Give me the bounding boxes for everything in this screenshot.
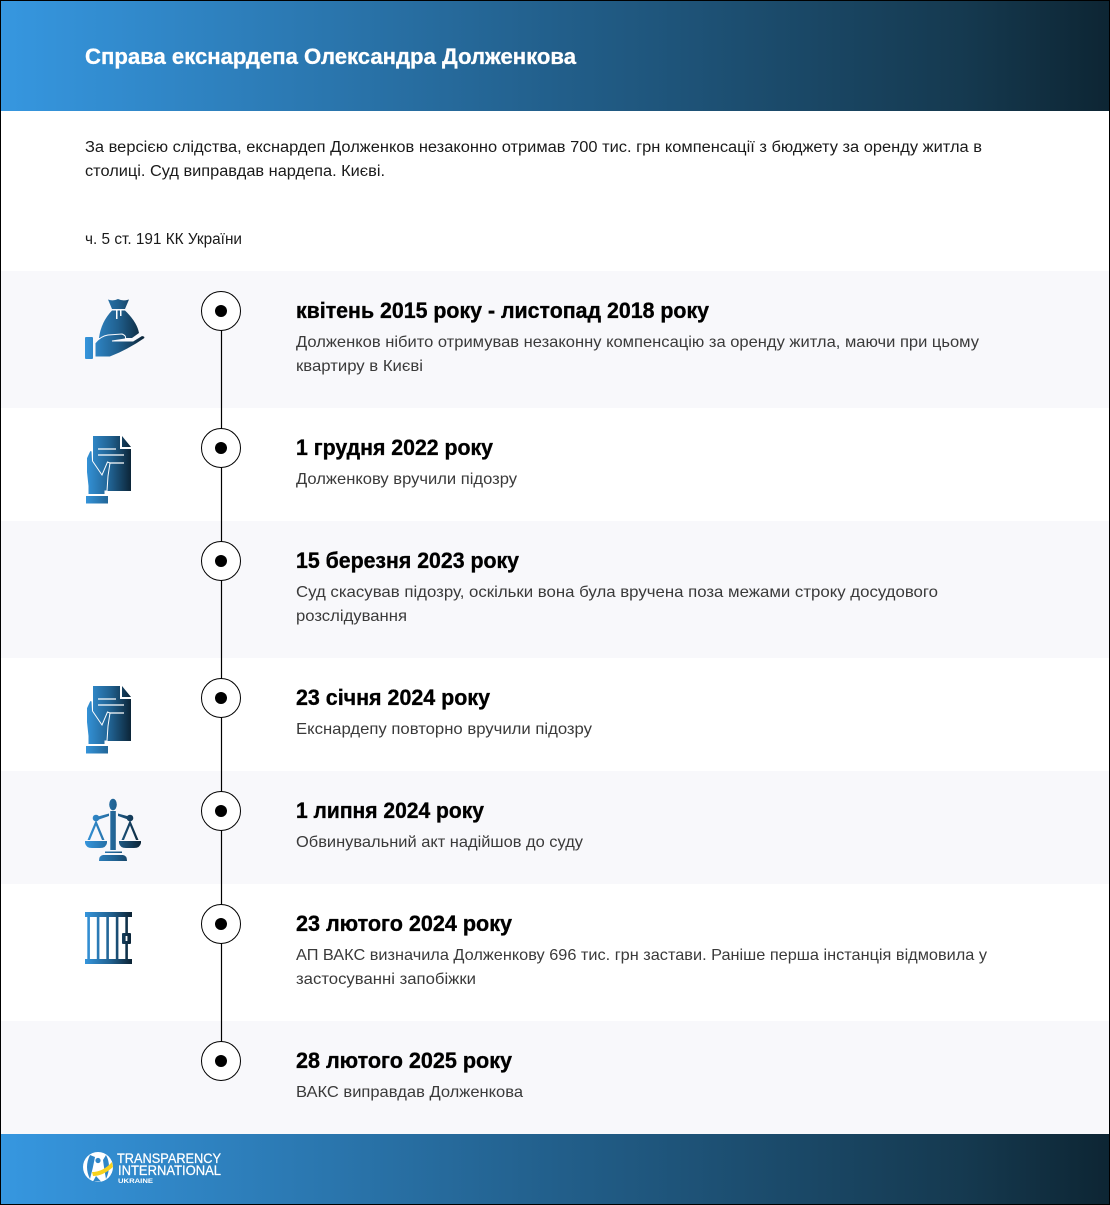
event: 23 січня 2024 [202,678,592,738]
event: 15 березня 2023: Суд скасував підозру, оскільки вона була вручена поза межами строку досудового [296,584,938,601]
event: 15 березня 2023 [202,542,938,625]
icon: scales of justice [85,799,141,861]
header banner [0,0,1110,111]
event: 1 липня 2024 [202,792,583,851]
event: 23 січня 2024: 23 січня 2024 року [296,685,491,710]
event: 28 лютого 2025 [202,1042,523,1101]
intro text: За версією слідства, екснардеп Долженков незаконно отримав 700 тис. грн компенсації з бюджету за оренду житла в [85,139,982,156]
footer banner [0,1134,1110,1205]
event: 23 лютого 2024: АП ВАКС визначила Долженкову 696 тис. грн застави. Раніше перша інстанція відмовила у [296,947,987,964]
event: 28 лютого 2025: ВАКС виправдав Долженкова [296,1084,523,1101]
intro text: столиці. Суд виправдав нардепа. Києві. [85,163,385,180]
logo: Transparency International Ukraine [83,1150,222,1185]
event: квітень 2015: квітень 2015 року - листопад 2018 року [296,298,710,323]
event: 15 березня 2023: розслідування [296,608,407,625]
icon: hand with document [86,436,131,504]
event: 1 липня 2024: Обвинувальний акт надійшов до суду [296,834,583,851]
logo: Transparency International Ukraine: TRANSPARENCY [117,1150,222,1166]
event: 28 лютого 2025: 28 лютого 2025 року [296,1048,513,1073]
event: 1 липня 2024: 1 липня 2024 року [296,798,485,823]
logo: Transparency International Ukraine: INTERNATIONAL [118,1162,221,1178]
event: квітень 2015 [202,292,979,375]
event: квітень 2015: Долженков нібито отримував незаконну компенсацію за оренду житла, маючи при цьому [296,334,979,351]
icon: money bag in hand [85,299,145,359]
event: 1 грудня 2022: Долженкову вручили підозру [296,471,517,488]
event: 1 грудня 2022: 1 грудня 2022 року [296,435,494,460]
intro text [85,139,982,180]
logo: Transparency International Ukraine: UKRAINE [118,1178,154,1185]
event: квітень 2015: квартиру в Києві [296,358,423,375]
event: 15 березня 2023: 15 березня 2023 року [296,548,520,573]
legal article: ч. 5 ст. 191 КК України [85,231,242,248]
timeline line [220,311,222,1061]
event: 23 лютого 2024 [202,904,987,988]
event: 23 січня 2024: Екснардепу повторно вручили підозру [296,721,592,738]
event: 1 грудня 2022 [202,428,517,488]
event: 23 лютого 2024: застосуванні запобіжки [296,971,476,988]
icon: hand with document (repeat) [86,686,131,754]
row backgrounds [0,271,1110,1134]
icon: prison bars [85,912,132,964]
title: Справа екснардепа Олександра Долженкова [85,44,577,69]
event: 23 лютого 2024: 23 лютого 2024 року [296,911,513,936]
